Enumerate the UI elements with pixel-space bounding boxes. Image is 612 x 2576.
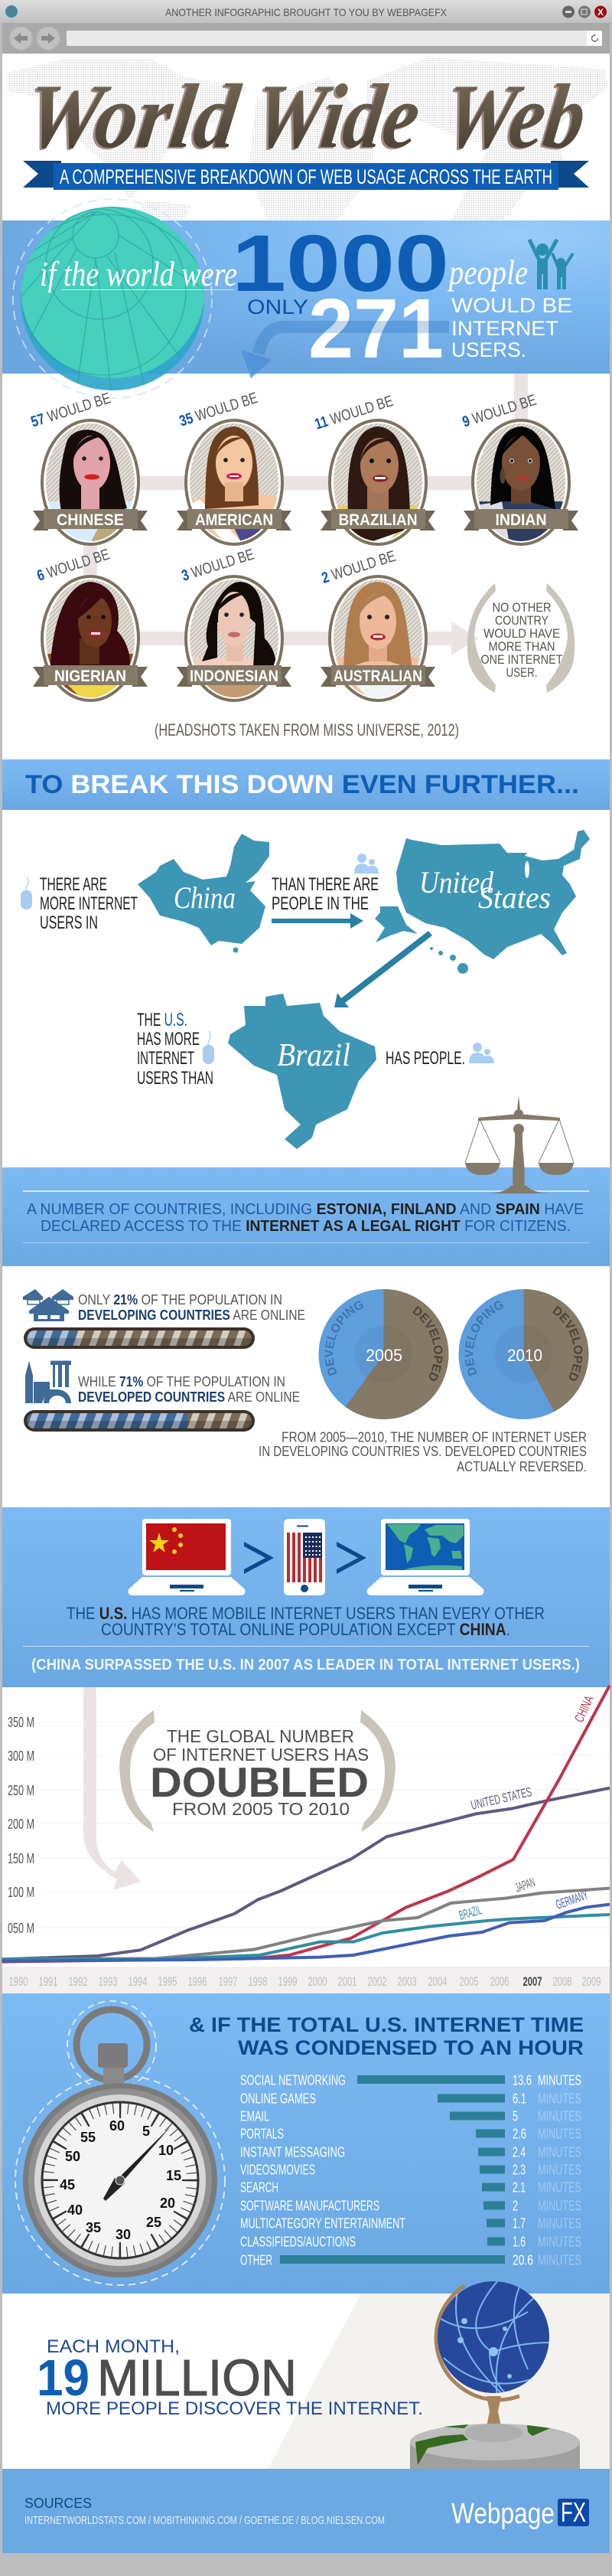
bar chart: minutes by category: SOCIAL NETWORKING	[240, 2073, 346, 2088]
would be internet users: INTERNET	[451, 317, 558, 340]
pie chart: 2005: DEVELOPED	[412, 1306, 442, 1381]
map: China	[138, 834, 269, 952]
x axis years: 2007	[523, 1974, 542, 1989]
portrait: Chinese	[29, 390, 148, 544]
would be label: 6 WOULD BE	[35, 546, 112, 585]
map: Brazil: Brazil	[277, 1038, 350, 1073]
bar chart: minutes by category: SOFTWARE MANUFACTURERS	[240, 2199, 379, 2214]
text: the U.S. has more internet users than: USERS THAN	[137, 1068, 213, 1089]
x axis years: 2005	[459, 1974, 479, 1989]
panel: developing versus developed	[23, 1289, 589, 1474]
reversal text	[259, 1430, 587, 1474]
x axis years: 1997	[219, 1974, 237, 1989]
pie chart: 2005: 2005	[366, 1346, 402, 1365]
y axis labels	[8, 1715, 34, 1936]
heading band: to break this down	[2, 759, 610, 810]
pie chart: 2005	[318, 1289, 448, 1419]
bar chart: minutes by category: VIDEOS/MOVIES	[240, 2162, 315, 2177]
text: the U.S. has more internet users than: THE U.S.	[137, 1010, 187, 1030]
name ribbon: CHINESE	[57, 511, 124, 529]
dial numbers: 55	[80, 2130, 96, 2145]
back and forward buttons	[9, 27, 60, 50]
legal right text: DECLARED ACCESS TO THE INTERNET AS A LEGAL RIGHT FOR CITIZENS.	[41, 1218, 571, 1235]
callout: no other country: ONE INTERNET	[480, 652, 563, 667]
icon: mouse	[21, 877, 32, 909]
x axis years: 2008	[552, 1974, 572, 1989]
x axis years: 1993	[98, 1974, 118, 1989]
pie chart: 2010	[459, 1289, 589, 1419]
bar chart: minutes by category: OTHER	[240, 2252, 272, 2267]
icon: laptop with China flag	[129, 1519, 245, 1595]
series labels: CHINA	[571, 1693, 597, 1725]
pie chart: 2005: DEVELOPING	[324, 1301, 363, 1376]
dial numbers: 20	[160, 2196, 175, 2211]
y axis labels: 300 M	[8, 1748, 34, 1764]
main title	[18, 67, 592, 169]
callout: doubled: DOUBLED	[150, 1758, 369, 1806]
progress bar: 71%	[24, 1410, 255, 1432]
name ribbon	[33, 665, 148, 687]
x axis years: 2004	[428, 1974, 447, 1989]
y axis labels: 050 M	[8, 1921, 34, 1936]
would be label: 57 WOULD BE	[29, 390, 113, 431]
name ribbon: BRAZILIAN	[338, 511, 418, 529]
arrow	[83, 1687, 141, 1890]
x axis years: 1998	[248, 1974, 268, 1989]
arrow	[241, 327, 449, 378]
icon: scales of justice	[465, 1095, 574, 1193]
each month text: EACH MONTH,	[47, 2336, 180, 2357]
legal right text: A NUMBER OF COUNTRIES, INCLUDING ESTONIA, FINLAND AND SPAIN HAVE	[27, 1201, 584, 1218]
callout: doubled: THE GLOBAL NUMBER	[167, 1726, 354, 1746]
dial numbers: 10	[158, 2143, 174, 2158]
legal right text	[27, 1201, 584, 1235]
only: ONLY	[247, 295, 308, 318]
map: China: China	[174, 880, 236, 915]
callout: doubled: OF INTERNET USERS HAS	[153, 1745, 369, 1765]
developing stat: ONLY 21% OF THE POPULATION IN	[78, 1292, 282, 1308]
logo: WebpageFX: Webpage	[451, 2498, 555, 2530]
callout: doubled: FROM 2005 TO 2010	[172, 1799, 350, 1819]
callout: no other country: NO OTHER	[493, 600, 551, 615]
each month text: 19	[37, 2349, 90, 2407]
would be internet users	[451, 294, 572, 361]
icon: mouse	[203, 1031, 214, 1064]
people: people	[447, 253, 528, 292]
icon: city	[25, 1361, 71, 1403]
bar chart: minutes by category: 2.6	[513, 2127, 526, 2142]
bar chart: minutes by category: PORTALS	[240, 2127, 284, 2142]
bar chart: minutes by category: 2.4	[513, 2145, 526, 2160]
icon: phone with US flag	[284, 1519, 325, 1595]
would be label: 35 WOULD BE	[177, 390, 260, 430]
x axis years: 1999	[278, 1974, 297, 1989]
bar chart: minutes by category: 6.1	[513, 2091, 526, 2107]
pie chart: 2010: DEVELOPING	[465, 1301, 503, 1376]
text: has people: HAS PEOPLE.	[386, 1048, 465, 1069]
heading: WAS CONDENSED TO AN HOUR	[238, 2036, 584, 2059]
text: the U.S. has more internet users than: INTERNET	[137, 1048, 194, 1069]
each month text	[37, 2336, 423, 2419]
portrait: Indian	[461, 392, 578, 544]
each month text: MORE PEOPLE DISCOVER THE INTERNET.	[46, 2398, 423, 2419]
developed stat	[78, 1374, 300, 1405]
bar chart: minutes by category	[240, 2073, 581, 2267]
portrait: Indonesian	[177, 546, 291, 700]
icon: laptop with world map	[367, 1519, 483, 1595]
text: than there are people in the: THAN THERE ARE	[272, 874, 379, 895]
line chart: internet users by country	[2, 1686, 610, 1993]
icon: desk globe	[410, 2281, 580, 2469]
logo: WebpageFX: FX	[561, 2496, 586, 2528]
mobile text: THE U.S. HAS MORE MOBILE INTERNET USERS THAN EVERY OTHER	[67, 1604, 545, 1623]
bar chart: minutes by category: 1.6	[513, 2234, 526, 2249]
x axis years: 1992	[69, 1974, 87, 1989]
would be internet users: USERS.	[451, 338, 526, 361]
name ribbon: INDIAN	[496, 511, 546, 529]
portrait: American	[177, 390, 291, 544]
x axis years: 2006	[490, 1974, 509, 1989]
map: United States: States	[478, 880, 551, 915]
bar chart: minutes by category: MINUTES	[538, 2215, 581, 2231]
text: there are more internet users in: THERE ARE	[40, 874, 107, 895]
bar chart: minutes by category: MULTICATEGORY ENTERTAINMENT	[240, 2215, 405, 2231]
address bar	[67, 31, 602, 46]
arrow: United States to Brazil	[334, 931, 432, 1007]
panel: 19 million	[37, 2281, 610, 2469]
bar chart: minutes by category: 1.7	[513, 2215, 526, 2231]
portrait: Australian	[320, 548, 435, 700]
bar chart: minutes by category: MINUTES	[538, 2091, 581, 2107]
main title: World	[18, 68, 243, 169]
dotted world map background	[8, 57, 608, 220]
portrait: Brazilian	[313, 393, 435, 544]
mobile text: COUNTRY'S TOTAL ONLINE POPULATION EXCEPT CHINA.	[101, 1620, 510, 1639]
bar chart: minutes by category: CLASSIFIEDS/AUCTIONS	[240, 2234, 356, 2249]
dial numbers: 5	[142, 2124, 150, 2139]
sources	[24, 2496, 385, 2527]
developed stat: DEVELOPED COUNTRIES ARE ONLINE	[78, 1389, 300, 1405]
series labels	[457, 1693, 597, 1923]
series labels: UNITED STATES	[470, 1784, 533, 1813]
text: there are more internet users in: MORE INTERNET	[40, 893, 138, 914]
heading band: to break this down: TO BREAK THIS DOWN EVEN FURTHER...	[25, 770, 579, 799]
dial numbers: 40	[67, 2202, 83, 2218]
dial numbers: 35	[86, 2220, 101, 2235]
name ribbon: AUSTRALIAN	[334, 668, 422, 685]
mobile text	[67, 1604, 545, 1639]
heading: & IF THE TOTAL U.S. INTERNET TIME	[189, 2013, 584, 2036]
developed stat: WHILE 71% OF THE POPULATION IN	[78, 1374, 285, 1389]
bar chart: minutes by category: MINUTES	[538, 2252, 581, 2267]
x axis years: 1995	[158, 1974, 177, 1989]
icon: window globe	[5, 5, 18, 18]
y axis labels: 250 M	[8, 1783, 34, 1798]
sources: SOURCES	[24, 2496, 92, 2511]
x axis years	[9, 1974, 601, 1989]
pie chart: 2010: 2010	[507, 1346, 542, 1365]
callout: no other country	[467, 583, 575, 693]
icon: people	[469, 1043, 494, 1063]
name ribbon	[321, 509, 435, 531]
x axis years: 2000	[308, 1974, 327, 1989]
reversal text: ACTUALLY REVERSED.	[457, 1459, 587, 1474]
text: than there are people in the	[272, 874, 379, 914]
dial numbers: 50	[65, 2149, 80, 2164]
portrait: Nigerian	[33, 546, 148, 700]
arrow: China to United States	[272, 913, 363, 929]
connector path: portraits	[83, 374, 528, 655]
greater than	[244, 1542, 274, 1574]
bar chart: minutes by category: MINUTES	[538, 2162, 581, 2177]
text: the U.S. has more internet users than: HAS MORE	[137, 1029, 200, 1050]
window buttons: X	[597, 7, 604, 18]
text: than there are people in the: PEOPLE IN THE	[272, 893, 369, 914]
browser window chrome	[0, 0, 612, 54]
dial numbers: 30	[116, 2227, 131, 2242]
would be label: 11 WOULD BE	[313, 393, 396, 433]
bar chart: minutes by category: 2	[513, 2199, 518, 2214]
developing stat	[78, 1292, 305, 1323]
panel: legal right	[2, 1167, 610, 1266]
would be label: 9 WOULD BE	[461, 392, 539, 431]
bar chart: minutes by category: ONLINE GAMES	[240, 2091, 316, 2107]
would be label: 2 WOULD BE	[320, 548, 398, 587]
map: Brazil	[228, 994, 376, 1149]
dial numbers: 45	[60, 2177, 75, 2192]
y axis labels: 200 M	[8, 1817, 34, 1832]
bar chart: minutes by category: INSTANT MESSAGING	[240, 2145, 345, 2160]
panel: internet time	[2, 1993, 610, 2294]
name ribbon	[177, 509, 291, 531]
greater than	[337, 1542, 366, 1574]
x axis years: 2009	[581, 1974, 601, 1989]
y axis labels: 150 M	[8, 1851, 34, 1866]
bar chart: minutes by category: MINUTES	[538, 2145, 581, 2160]
bar chart: minutes by category: 20.6	[513, 2252, 533, 2267]
pie chart: 2010: DEVELOPED	[552, 1306, 583, 1381]
x axis years: 1990	[9, 1974, 28, 1989]
x axis years: 2002	[367, 1974, 387, 1989]
panel: if the world were 1000 people	[2, 198, 610, 399]
map: United States	[375, 830, 590, 974]
bar chart: minutes by category: 13.6	[513, 2073, 532, 2088]
each month text: MILLION	[97, 2349, 297, 2407]
main title: Web	[438, 67, 592, 168]
main title: Web	[436, 68, 590, 169]
x axis years: 2003	[398, 1974, 416, 1989]
bar chart: minutes by category: MINUTES	[538, 2234, 581, 2249]
bar chart: minutes by category: 2.3	[513, 2162, 526, 2177]
panel: mobile users comparison	[2, 1507, 610, 1687]
1000: 1000	[232, 219, 449, 309]
bar chart: minutes by category: 5	[513, 2108, 518, 2124]
callout: doubled	[119, 1710, 396, 1832]
dial numbers: 60	[109, 2118, 125, 2134]
main title: Wide	[248, 67, 426, 168]
series labels: BRAZIL	[457, 1902, 483, 1923]
name ribbon	[33, 509, 148, 531]
text: there are more internet users in: USERS IN	[40, 913, 98, 933]
x axis years: 1996	[188, 1974, 207, 1989]
window buttons	[562, 6, 607, 18]
bar chart: minutes by category: MINUTES	[538, 2108, 581, 2124]
series lines	[2, 1686, 610, 1962]
x axis years: 2001	[338, 1974, 356, 1989]
x axis years: 1994	[129, 1974, 147, 1989]
headshots caption: (HEADSHOTS TAKEN FROM MISS UNIVERSE, 2012)	[155, 720, 459, 739]
China surpassed note: (CHINA SURPASSED THE U.S. IN 2007 AS LEADER IN TOTAL INTERNET USERS.)	[31, 1657, 580, 1673]
text: the U.S. has more internet users than	[137, 1010, 213, 1089]
callout: no other country: USER.	[506, 665, 537, 680]
icon: stopwatch	[15, 2001, 225, 2285]
progress bar: 21%	[24, 1327, 255, 1349]
text: there are more internet users in	[40, 874, 138, 933]
callout: no other country: COUNTRY	[495, 613, 549, 628]
bar chart: minutes by category: MINUTES	[538, 2127, 581, 2142]
panel: footer	[2, 2469, 610, 2553]
bar chart: minutes by category: MINUTES	[538, 2199, 581, 2214]
series labels: JAPAN	[513, 1875, 537, 1895]
callout: no other country: WOULD HAVE	[483, 626, 560, 641]
271: 271	[308, 282, 444, 376]
bar chart: minutes by category: MINUTES	[538, 2180, 581, 2196]
y axis labels: 100 M	[8, 1885, 34, 1900]
icon: globe	[12, 198, 213, 399]
dial numbers: 25	[146, 2215, 161, 2230]
x axis years: 1991	[38, 1974, 58, 1989]
map: United States: United	[419, 865, 494, 899]
name ribbon: NIGERIAN	[54, 668, 126, 685]
bar chart: minutes by category: 2.1	[513, 2180, 526, 2196]
dial numbers: 15	[166, 2168, 181, 2183]
bar chart: minutes by category: EMAIL	[240, 2108, 269, 2124]
name ribbon: AMERICAN	[195, 511, 273, 529]
window title: ANOTHER INFOGRAPHIC BROUGHT TO YOU BY WEBPAGEFX	[165, 6, 448, 18]
icon: people figures	[529, 240, 573, 289]
developing stat: DEVELOPING COUNTRIES ARE ONLINE	[78, 1308, 305, 1323]
would be label: 3 WOULD BE	[180, 546, 256, 585]
bar chart: minutes by category: SEARCH	[240, 2180, 278, 2196]
bar chart: minutes by category: MINUTES	[538, 2073, 581, 2088]
main title: Wide	[246, 68, 424, 169]
name ribbon	[464, 509, 578, 531]
would be internet users: WOULD BE	[451, 294, 572, 317]
stopwatch hand	[103, 2126, 171, 2201]
icon: people	[354, 854, 379, 873]
name ribbon: INDONESIAN	[190, 668, 278, 685]
main title: World	[20, 67, 246, 168]
sources: INTERNETWORLDSTATS.COM / MOBITHINKING.COM / GOETHE.DE / BLOG.NIELSEN.COM	[24, 2514, 385, 2527]
if the world were: if the world were	[40, 254, 237, 293]
icon: huts	[23, 1289, 73, 1321]
dial numbers	[60, 2118, 181, 2242]
y axis labels: 350 M	[8, 1715, 34, 1730]
callout: no other country: MORE THAN	[488, 639, 555, 654]
heading	[189, 2013, 584, 2059]
